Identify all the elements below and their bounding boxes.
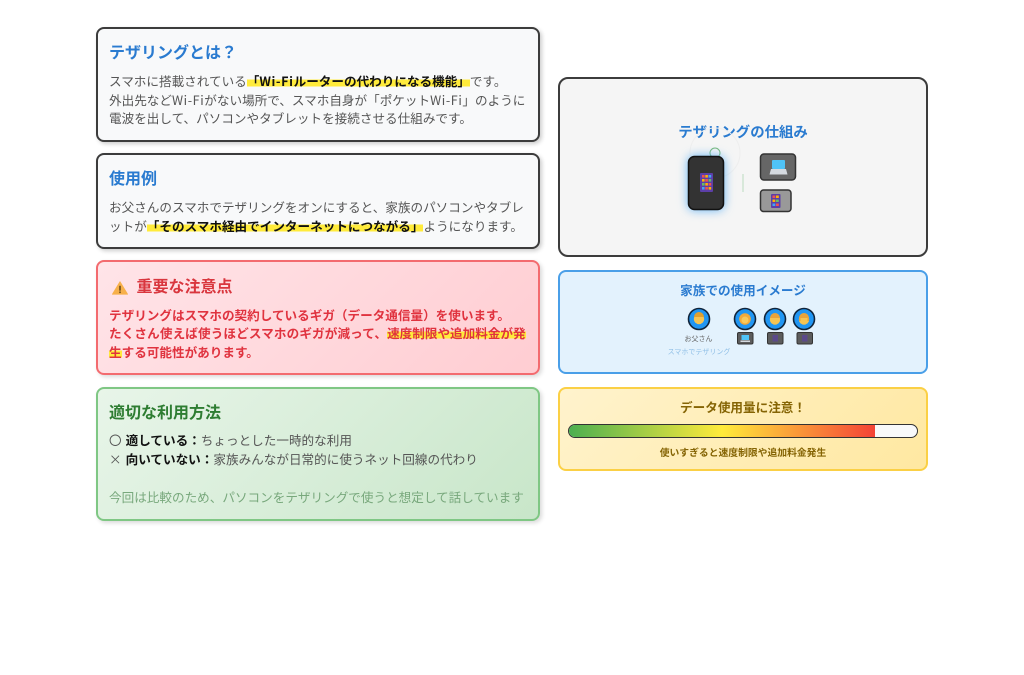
text: suitable and unsuitable uses: 〇 xyxy=(109,430,122,449)
icon: smartphone xyxy=(688,156,724,210)
chart: data usage bar xyxy=(568,424,918,438)
text: warning description xyxy=(109,304,526,361)
text: definition xyxy=(109,71,525,127)
text: warning description: 生する可能性があります。 xyxy=(109,342,259,361)
icon: father xyxy=(688,308,710,330)
icon: child two xyxy=(794,308,814,330)
text: suitable and unsuitable uses xyxy=(109,430,478,468)
heading: what is tethering: テザリングとは？ xyxy=(109,39,237,63)
heading: important warning: 重要な注意点 xyxy=(136,272,233,296)
text: suitable and unsuitable uses: 適している：ちょっとした一時的な利用 xyxy=(126,430,352,449)
text: warning description: テザリングはスマホの契約しているギガ（データ通信量）を使います。 xyxy=(109,304,510,324)
text: suitable and unsuitable uses: 向いていない：家族みんなが日常的に使うネット回線の代わり xyxy=(126,449,478,468)
text: definition: 外出先などWi-Fiがない場所で、スマホ自身が「ポケットWi-Fi」のように xyxy=(109,90,525,109)
panel: how tethering works xyxy=(558,77,928,257)
heading: proper usage: 適切な利用方法 xyxy=(109,399,221,423)
panel: proper usage xyxy=(96,387,540,521)
icon: laptop xyxy=(760,154,796,180)
text: definition: 電波を出して、パソコンやタブレットを接続させる仕組みです。 xyxy=(109,108,472,127)
text: usage description xyxy=(109,197,524,235)
panel: what is tethering xyxy=(96,27,540,142)
heading: how tethering works: テザリングの仕組み xyxy=(678,121,808,142)
icon: tablet small one xyxy=(768,332,783,344)
text: warning description: たくさん使えば使うほどスマホのギガが減って、速度制限や追加料金が発 xyxy=(109,323,526,342)
text: note: 今回は比較のため、パソコンをテザリングで使うと想定して話しています xyxy=(109,487,524,506)
icon: child one xyxy=(764,308,786,330)
text: suitable and unsuitable uses: × xyxy=(109,449,122,468)
panel: usage example xyxy=(96,153,540,249)
icon: warning sign xyxy=(112,281,128,295)
diagram: phone to devices xyxy=(680,128,796,218)
icon: tablet xyxy=(760,190,791,212)
icon: laptop small xyxy=(738,332,753,344)
panel: family usage image xyxy=(558,270,928,374)
panel: data usage warning xyxy=(558,387,928,471)
heading: family usage image: 家族での使用イメージ xyxy=(680,280,806,299)
wifi signal rings xyxy=(690,128,743,192)
label: father: お父さん xyxy=(684,334,712,344)
label: tethering with phone: スマホでテザリング xyxy=(668,346,730,356)
text: definition: スマホに搭載されている「Wi-Fiルーターの代わりになる機能」です。 xyxy=(109,71,506,90)
panel: important warning xyxy=(96,260,540,375)
icon: tablet small two xyxy=(797,332,812,344)
family icons xyxy=(688,308,816,344)
bar fill xyxy=(569,425,875,437)
text: usage description: お父さんのスマホでテザリングをオンにすると、家族のパソコンやタブレ xyxy=(109,197,524,216)
text: usage description: ットが「そのスマホ経由でインターネットにつながる」ようになります。 xyxy=(109,216,523,235)
caption: data usage: 使いすぎると速度制限や追加料金発生 xyxy=(660,444,826,458)
heading: usage example: 使用例 xyxy=(109,165,157,189)
icon: mother xyxy=(734,308,756,330)
heading: data usage warning: データ使用量に注意！ xyxy=(680,397,806,416)
